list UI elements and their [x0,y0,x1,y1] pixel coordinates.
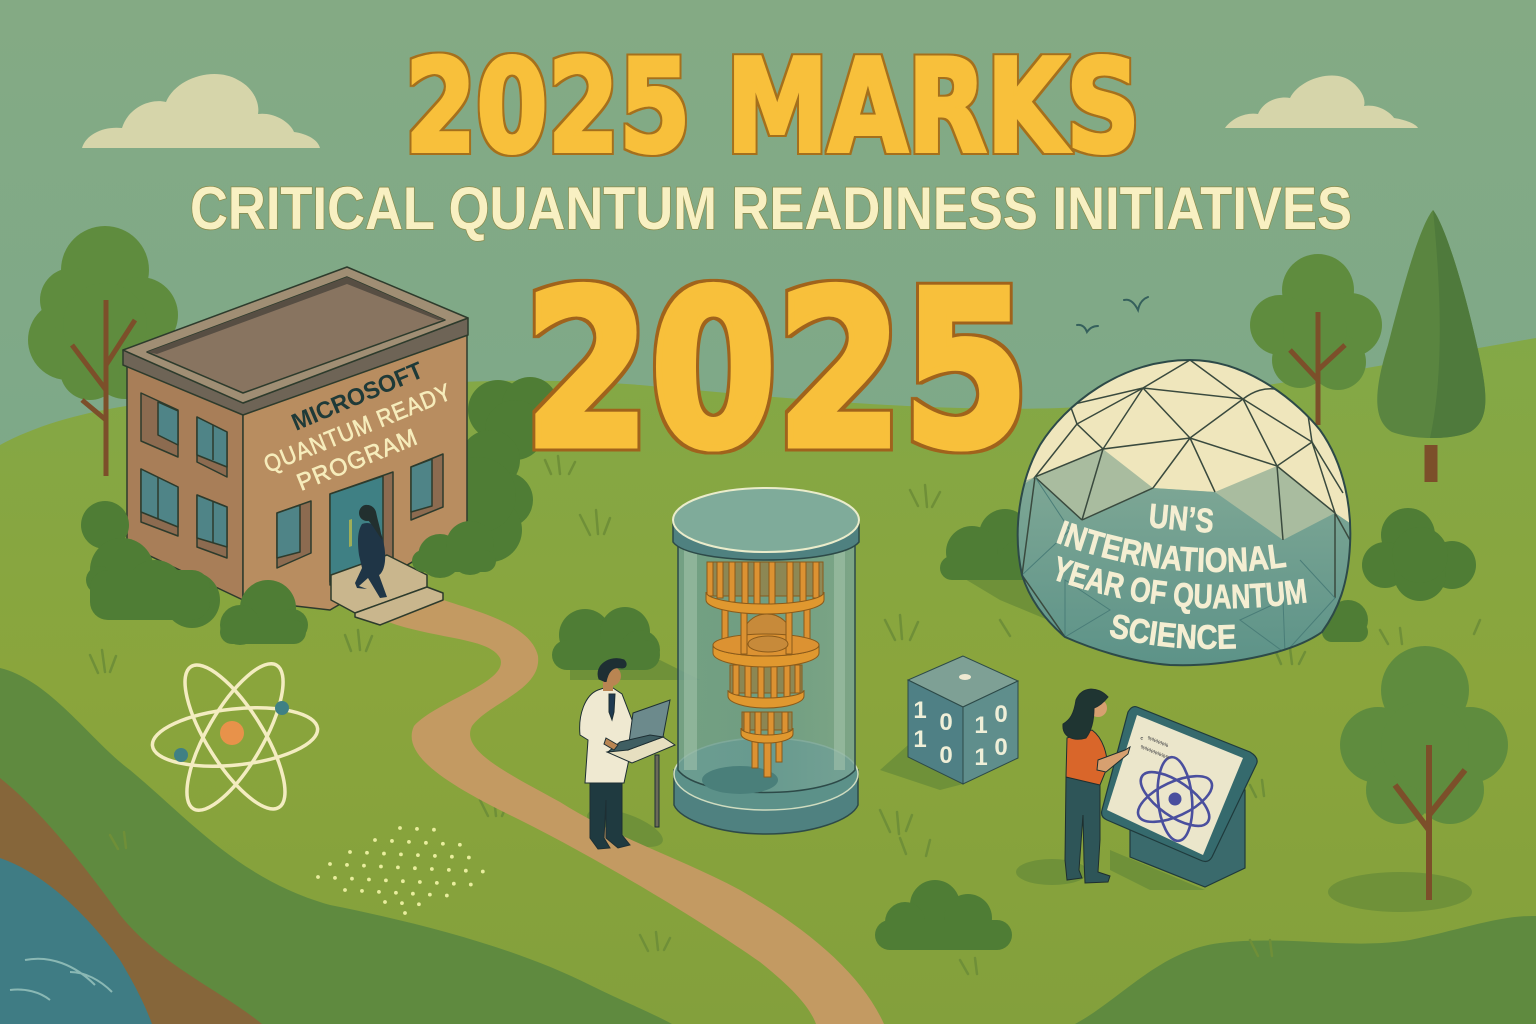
grass tufts [90,456,1480,974]
tablet atom [1132,756,1218,842]
person leaving building [355,505,387,598]
tree: lower right [1340,646,1508,900]
sign: Program: PROGRAM [293,424,422,497]
large year 2025: 2025 [524,245,1029,496]
building roof inset [147,277,445,393]
building window 4 [197,495,227,558]
dome label text: UN’S [1150,504,1213,533]
kiosk base [1130,790,1245,887]
bush: building front left [81,501,220,628]
scientist head [598,659,626,691]
chandelier pins [752,738,782,777]
kiosk tablet [1102,707,1257,887]
dome label text: INTERNATIONAL [1056,520,1287,572]
cube binary digits: 1 [913,726,927,753]
bush: near cylinder [552,607,700,680]
bushes: right of building [440,430,533,575]
chandelier tier 2 [713,608,819,667]
bush: behind 2025 [468,377,558,460]
cylinder floor [674,738,858,810]
title: 2025 MARKS: 2025 MARKS [405,33,1140,182]
laptop [608,700,670,752]
scientist tie [609,694,615,720]
chandelier tier 4 [741,712,793,743]
dome: UN's International Year of Quantum Science [1016,359,1352,666]
tree: right round [1250,254,1382,425]
bush: beside dome [940,509,1060,625]
scientist legs [590,782,630,849]
cylinder glass tube [678,530,855,792]
tree: left [28,226,178,476]
cylinder lid [673,488,859,552]
bush: bottom centre [875,880,1012,950]
scientist stand [607,737,675,827]
dome label text: SCIENCE [1110,614,1236,650]
cube binary digits: 0 [994,734,1008,761]
tablet screen [1107,715,1243,855]
dome body [1018,361,1350,664]
woman hair [1063,689,1108,739]
scientist hand [604,738,618,750]
cube binary digits: 1 [974,712,988,739]
dot grid [318,828,492,914]
subtitle: CRITICAL QUANTUM READINESS INITIATIVES [190,175,1352,242]
sign: Quantum Ready: QUANTUM READY [260,379,456,479]
ground shadows [583,745,1472,912]
building left wall [127,362,243,600]
tablet small text: %%%%%%% [1139,744,1171,762]
quantum computer cylinder [673,488,859,834]
tablet small text: %%%%% [1146,735,1170,749]
footpath [378,598,884,1024]
cloud: right [1225,75,1418,128]
woman legs [1065,777,1110,883]
cylinder lid side [673,520,859,560]
building window 5 [277,501,311,568]
sign: Microsoft: MICROSOFT [288,357,428,437]
river [0,858,152,1024]
tablet small text: c [1139,735,1144,742]
bush: building front centre [220,580,308,645]
scientist with laptop [580,659,675,849]
bush: dome edge [1322,600,1368,642]
woman head [1089,699,1107,717]
cube binary digits: 1 [913,697,927,724]
building right wall [243,332,467,610]
atom symbol [150,651,320,823]
building steps [331,555,443,625]
building parapet sides [123,318,468,415]
cube binary digits: 1 [974,744,988,771]
woman at kiosk [1063,689,1130,883]
bush: by steps [412,521,496,578]
building window 1 [141,393,178,457]
building window 3 [141,469,178,536]
woman arm [1097,747,1130,772]
chandelier tier 1 [706,562,824,614]
tablet small text [1139,735,1171,762]
chandelier tier 3 [728,665,804,708]
dome label text [1056,504,1307,650]
bush: right of dome [1362,508,1476,601]
floor shadow [702,766,778,794]
scientist coat [580,686,632,783]
dome outline [1018,360,1350,665]
cryostat chandelier [706,562,824,777]
cube binary digits [913,697,1008,771]
roof inner shadow [147,277,445,354]
woman shirt [1066,730,1107,785]
tablet frame [1102,707,1257,861]
ground: lower left hill [0,668,672,1024]
birds [1077,297,1148,332]
cube binary digits: 0 [939,742,953,769]
ground: main meadow [0,338,1536,1024]
building roof [123,267,468,403]
building sign text [260,357,456,497]
building: Microsoft Quantum Ready Program [123,267,468,625]
cloud: left [82,74,320,148]
building door [330,472,393,585]
building window 2 [197,417,227,477]
dome label text: YEAR OF QUANTUM [1056,556,1307,614]
tree: conifer [1377,210,1485,482]
building window 6 [411,454,443,520]
cube binary digits: 0 [994,701,1008,728]
cube binary digits: 0 [939,709,953,736]
binary cube [908,656,1018,784]
cylinder base [674,770,858,834]
ground: lower right hill [1075,916,1536,1024]
glass highlights [684,550,845,770]
river bank [0,778,262,1024]
